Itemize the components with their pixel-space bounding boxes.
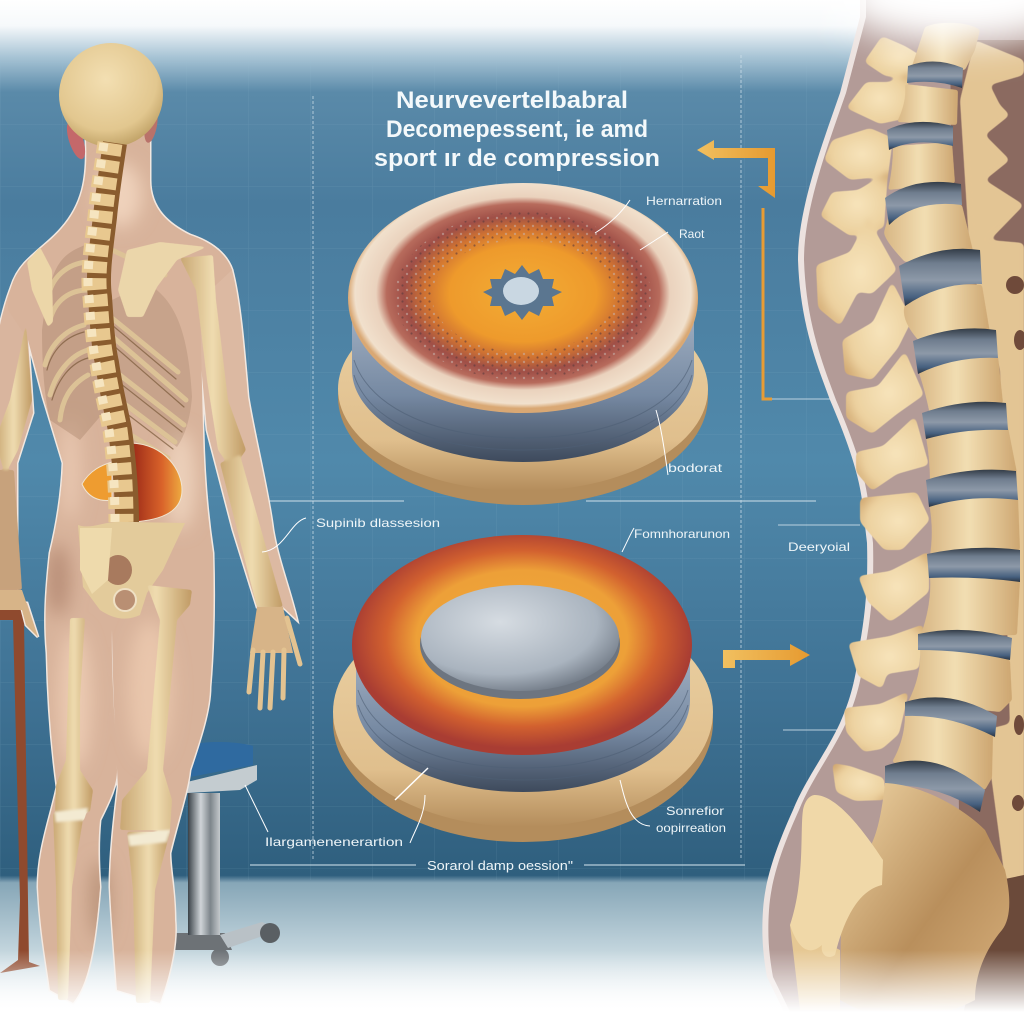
top disc diagram <box>338 183 708 505</box>
upper arm bones <box>0 255 283 607</box>
label: Herniation: Hernarration <box>646 194 722 208</box>
left arm <box>0 258 38 637</box>
label: Dermoid: Deeryoial <box>788 540 850 554</box>
arrow: top right bent <box>697 140 775 198</box>
label: Herniation <box>595 194 722 233</box>
stool <box>173 742 280 966</box>
label: Isolated <box>656 410 723 475</box>
top surface <box>348 183 698 413</box>
intervertebral discs <box>885 61 1020 812</box>
base plate <box>338 289 708 505</box>
label: Formation <box>622 527 730 552</box>
label: Formation: Fomnhorarunon <box>634 527 730 541</box>
label: Isolated: bodorat <box>668 461 723 475</box>
pelvis <box>78 522 185 619</box>
blueprint guide lines <box>250 55 870 865</box>
title: sport ır de compression <box>374 145 660 172</box>
ears <box>63 119 89 161</box>
label: Sensor compression: oopirreation <box>656 821 726 835</box>
head <box>59 43 163 147</box>
label: Root <box>640 227 705 250</box>
figure: standing human anatomy, back view <box>0 43 300 1003</box>
torso and legs <box>8 130 232 1003</box>
bottom fade <box>0 950 1024 1012</box>
silver disc <box>420 589 620 699</box>
shoulder blades <box>27 242 207 327</box>
title <box>374 87 660 172</box>
iliac wing <box>790 795 883 957</box>
transverse processes <box>816 36 930 801</box>
label: Spinal decompression: Sorarol damp oession" <box>427 858 573 873</box>
body shading <box>46 163 196 940</box>
leg bones <box>53 585 192 1003</box>
flesh backdrop edge glow <box>762 0 1024 1024</box>
right arm <box>190 235 297 620</box>
top fade over spine <box>835 0 1024 43</box>
body glow outline <box>0 130 297 1003</box>
arrow: bottom right <box>723 644 810 668</box>
bottom disc diagram <box>333 535 713 842</box>
wooden rod <box>0 609 40 973</box>
label: Inflammation <box>245 768 428 849</box>
right process mass <box>960 40 1024 880</box>
red surface <box>352 535 692 755</box>
dark flesh right <box>950 40 1024 900</box>
ribcage <box>42 245 192 458</box>
base plate <box>333 602 713 842</box>
label: Spinal distension <box>262 516 440 552</box>
flesh backdrop <box>768 0 1024 1024</box>
label: Inflammation: Ilargamenenerartion <box>265 835 403 849</box>
title: Decomepessent, ie amd <box>386 116 648 143</box>
hand bones <box>0 590 300 708</box>
iliac base <box>790 925 840 1010</box>
central gear nucleus <box>483 265 562 320</box>
label: Sensor compression: Sonrefior <box>666 804 724 818</box>
spine panel: close-up lumbar spine <box>762 0 1024 1024</box>
arrow: vertical connector <box>763 208 772 399</box>
sacrum <box>840 783 1009 1018</box>
lumbar highlight <box>82 443 182 522</box>
title: Neurvevertelbabral <box>396 87 628 114</box>
label: Root: Raot <box>679 227 705 241</box>
vertebral bodies <box>884 23 1020 790</box>
label: Spinal distension: Supinib dlassesion <box>316 516 440 530</box>
labels and leaders <box>245 194 850 873</box>
layered annulus <box>352 296 694 462</box>
spine column <box>88 143 127 522</box>
layered annulus <box>356 640 690 792</box>
speckled ring <box>395 212 651 380</box>
label: Sensor compression <box>620 780 726 835</box>
